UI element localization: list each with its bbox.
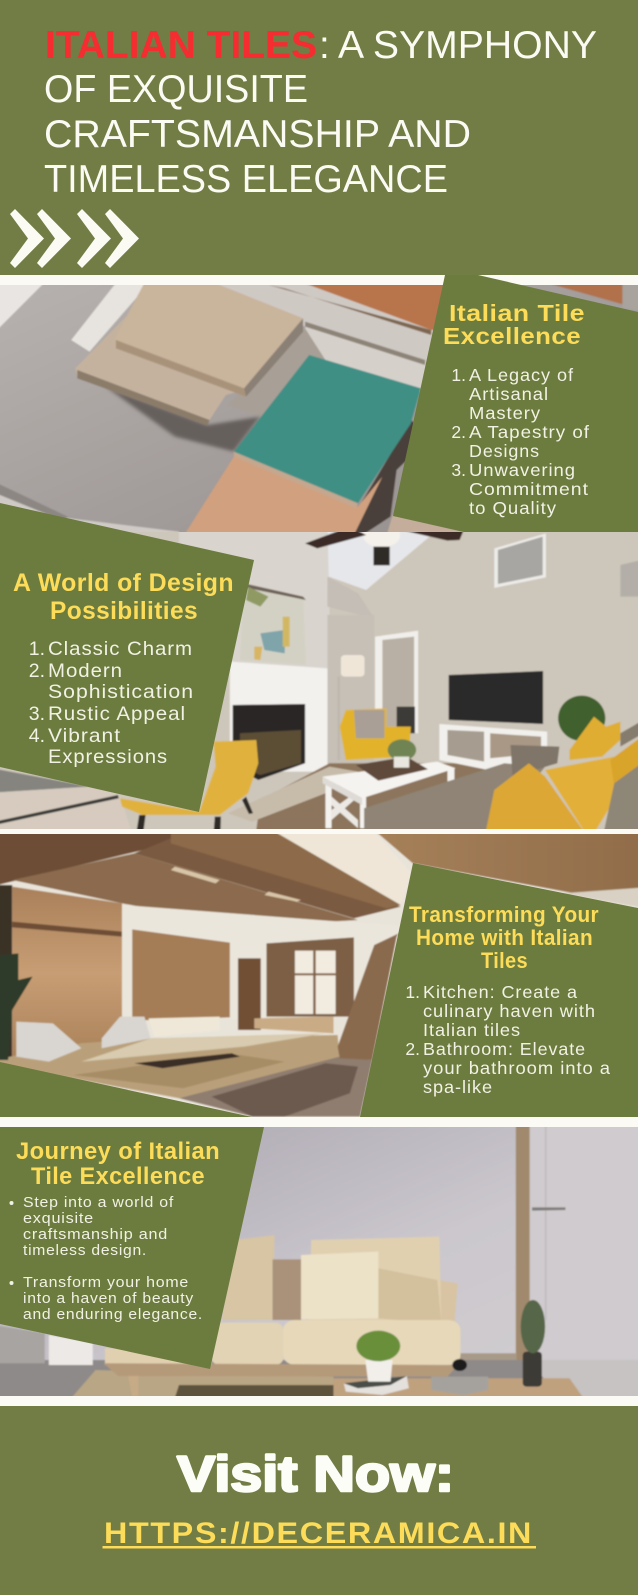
numbered list: Designs bbox=[469, 441, 540, 461]
title line 3: CRAFTSMANSHIP AND bbox=[44, 113, 471, 156]
bullet list: and enduring elegance. bbox=[23, 1306, 203, 1323]
numbered list: Classic Charm bbox=[48, 638, 193, 660]
heading: Transforming Your bbox=[409, 902, 599, 927]
icon: chevron arrows bbox=[10, 209, 139, 268]
numbered list: your bathroom into a bbox=[423, 1058, 611, 1078]
heading: A World of Design bbox=[13, 569, 234, 597]
title line 1 words: A SYMPHONY bbox=[338, 24, 597, 67]
numbered list: Bathroom: Elevate bbox=[423, 1039, 586, 1059]
numbered list: Rustic Appeal bbox=[48, 703, 186, 725]
heading: Home with Italian bbox=[416, 925, 593, 950]
corner wedge bbox=[0, 1062, 252, 1117]
heading: Tile Excellence bbox=[31, 1163, 205, 1190]
heading: Possibilities bbox=[50, 597, 198, 625]
title line 4: TIMELESS ELEGANCE bbox=[44, 158, 448, 201]
numbered list: 1. bbox=[451, 365, 466, 385]
photo: tile samples bbox=[0, 285, 638, 532]
website link: HTTPS://DECERAMICA.IN bbox=[104, 1517, 533, 1550]
panel: Italian Tile Excellence bbox=[393, 275, 638, 532]
numbered list: Sophistication bbox=[48, 681, 194, 703]
numbered list: Artisanal bbox=[469, 384, 549, 404]
call to action: visit now: Visit Now: bbox=[177, 1446, 454, 1502]
numbered list: 2. bbox=[451, 422, 466, 442]
heading: Journey of Italian bbox=[16, 1138, 220, 1165]
bullet list: Transform your home bbox=[23, 1274, 189, 1291]
panel: Journey of Italian Tile Excellence bbox=[0, 1127, 264, 1369]
numbered list: 3. bbox=[29, 703, 45, 725]
numbered list: Italian tiles bbox=[423, 1020, 521, 1040]
numbered list: culinary haven with bbox=[423, 1001, 596, 1021]
numbered list: Commitment bbox=[469, 479, 589, 499]
bullet list: timeless design. bbox=[23, 1242, 147, 1259]
footer band bbox=[0, 1406, 638, 1595]
numbered list: A Legacy of bbox=[469, 365, 574, 385]
numbered list: 1. bbox=[405, 982, 420, 1002]
numbered list: Unwavering bbox=[469, 460, 576, 480]
numbered list: 2. bbox=[29, 660, 45, 682]
heading: Tiles bbox=[481, 948, 528, 973]
bullet list: into a haven of beauty bbox=[23, 1290, 194, 1307]
photo: beige sofa against wall bbox=[0, 1127, 638, 1396]
numbered list: 4. bbox=[29, 725, 45, 747]
numbered list: Mastery bbox=[469, 403, 541, 423]
heading: Excellence bbox=[443, 323, 581, 349]
numbered list: Expressions bbox=[48, 746, 168, 768]
numbered list: spa-like bbox=[423, 1077, 493, 1097]
numbered list: Vibrant bbox=[48, 725, 121, 747]
numbered list bbox=[29, 638, 194, 768]
panel: A World of Design Possibilities bbox=[0, 503, 254, 812]
numbered list: Kitchen: Create a bbox=[423, 982, 578, 1002]
numbered list bbox=[405, 982, 611, 1097]
heading bbox=[16, 1138, 220, 1190]
numbered list: Modern bbox=[48, 660, 123, 682]
heading: Italian Tile bbox=[449, 300, 585, 326]
heading: Italian Tiles highlight: ITALIAN TILES bbox=[45, 24, 317, 67]
numbered list: 1. bbox=[29, 638, 45, 660]
title line 1 colon: : bbox=[319, 24, 330, 67]
header band bbox=[0, 0, 638, 275]
numbered list bbox=[451, 365, 590, 518]
bullet list: craftsmanship and bbox=[23, 1226, 168, 1243]
heading bbox=[443, 300, 585, 349]
numbered list: 3. bbox=[451, 460, 466, 480]
numbered list: to Quality bbox=[469, 498, 557, 518]
bullet list bbox=[10, 1194, 203, 1323]
heading bbox=[409, 902, 599, 973]
panel: Transforming Your Home with Italian Tiles bbox=[0, 863, 638, 1117]
photo: living room with yellow chairs bbox=[0, 522, 638, 840]
numbered list: 2. bbox=[405, 1039, 420, 1059]
title line 2: OF EXQUISITE bbox=[44, 68, 308, 111]
bullet list: Step into a world of bbox=[23, 1194, 174, 1211]
panel: title bbox=[44, 24, 597, 201]
heading bbox=[13, 569, 234, 625]
photo: wooden Japanese-style room bbox=[0, 823, 638, 1130]
numbered list: A Tapestry of bbox=[469, 422, 590, 442]
bullet list: exquisite bbox=[23, 1210, 94, 1227]
